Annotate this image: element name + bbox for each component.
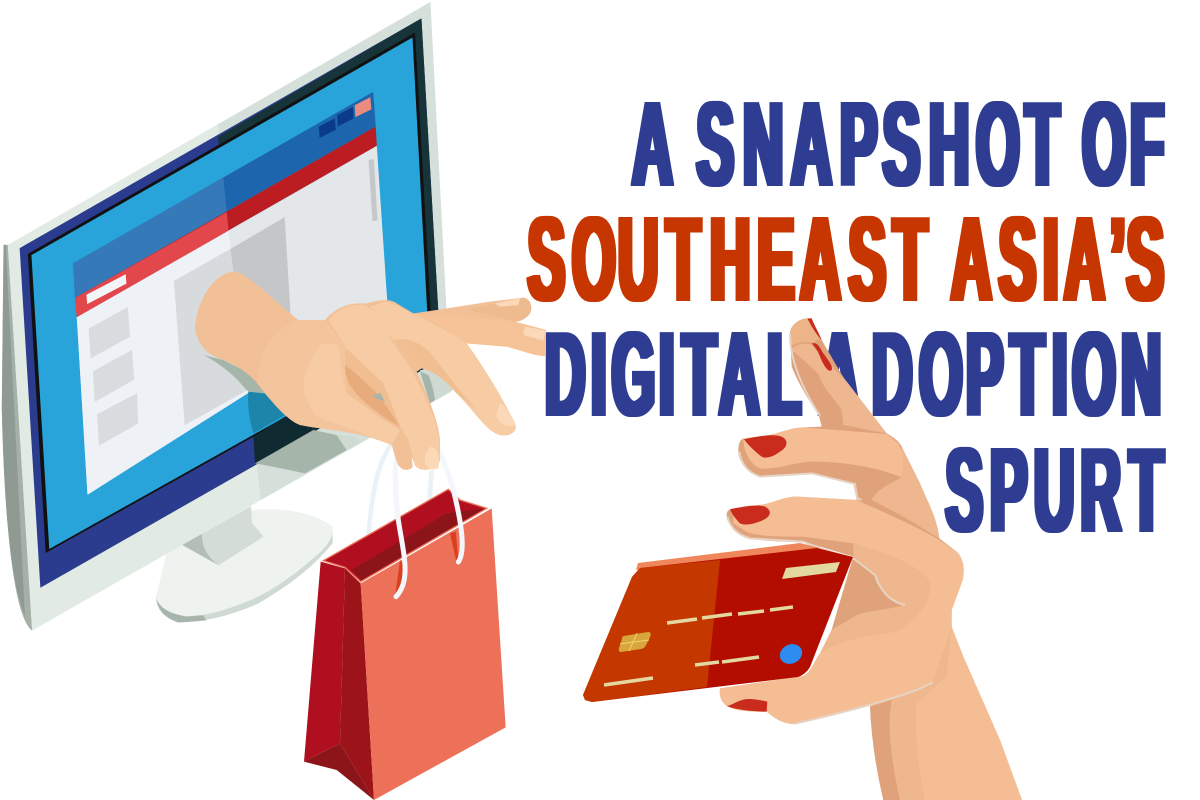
title line: SOUTHEAST ASIA'S: SOUTHEAST ASIA’S [528, 192, 1164, 326]
small gap between fingers [372, 393, 385, 402]
front handles [395, 432, 462, 597]
title line: SPURT: SPURT [946, 423, 1163, 557]
frame shadow under fingers [420, 372, 435, 403]
monitor stand base [156, 506, 333, 622]
hand shadow on page [203, 355, 265, 393]
bag front [361, 508, 506, 800]
middle finger [328, 305, 440, 470]
frame under fingers [420, 368, 453, 400]
web page window [73, 92, 387, 495]
illustration: shopping bag [304, 432, 506, 800]
knuckle area [872, 434, 939, 538]
back of hand mid tone [258, 320, 392, 445]
screen [31, 38, 429, 549]
nails [727, 318, 832, 712]
front finger [413, 313, 546, 356]
screen reflection [248, 392, 285, 433]
signature stripe [782, 562, 840, 579]
light chin shadow [337, 435, 362, 450]
palm shade [832, 557, 905, 630]
index finger highlight [792, 343, 887, 433]
bag gusset [340, 568, 374, 800]
card left half [583, 560, 720, 702]
gray chin shadow [255, 430, 347, 473]
dark glimpse between fingers [415, 365, 425, 371]
monitor frame [8, 2, 451, 631]
credit card [583, 543, 853, 702]
illustration: desktop monitor [2, 2, 451, 631]
handle tabs [395, 532, 458, 598]
window buttons [319, 97, 371, 138]
bag bottom fold [304, 743, 374, 800]
sidebar tiles [89, 307, 138, 446]
dark bezel shadow [253, 417, 313, 463]
index fingertip [790, 318, 820, 348]
deep shade between fingers [345, 365, 400, 427]
monitor frame shaded half [218, 2, 451, 500]
screen outline [28, 33, 432, 553]
finger crease [792, 343, 812, 347]
title line: A SNAPSHOT OF: A SNAPSHOT OF [632, 77, 1164, 211]
fingernails [425, 298, 546, 469]
lower finger and palm [720, 497, 964, 724]
monitor side edge [2, 245, 32, 631]
monitor bezel shaded half [218, 18, 441, 463]
index finger [370, 302, 516, 435]
shade between fingers [345, 348, 400, 427]
search field [86, 274, 126, 304]
illustration: reaching hand [195, 272, 546, 470]
contactless dot [777, 641, 805, 667]
finger outline highlights [727, 333, 933, 724]
title [528, 77, 1164, 557]
illustration: credit card hand [720, 318, 1022, 800]
bag left side [304, 562, 345, 762]
card number [604, 607, 793, 685]
monitor bezel [20, 18, 441, 588]
chip [619, 632, 651, 652]
card body [583, 548, 853, 702]
main image tile [174, 217, 293, 425]
index finger shade [393, 339, 477, 410]
card top edge [636, 543, 820, 570]
monitor shadows behind hand [203, 355, 453, 473]
page red bar [75, 127, 377, 317]
hand shape [195, 272, 546, 470]
title line: DIGITAL ADOPTION: DIGITAL ADOPTION [545, 307, 1161, 441]
bag inside [323, 489, 487, 582]
forearm [870, 627, 1022, 800]
page body [77, 146, 387, 495]
page header [73, 92, 376, 298]
scrollbar [369, 159, 377, 221]
hand silhouette [720, 318, 964, 724]
back handles [368, 432, 432, 535]
top finger [743, 427, 903, 477]
palm mid tone [820, 543, 930, 653]
back finger [467, 298, 531, 322]
back of hand highlight [303, 343, 400, 445]
